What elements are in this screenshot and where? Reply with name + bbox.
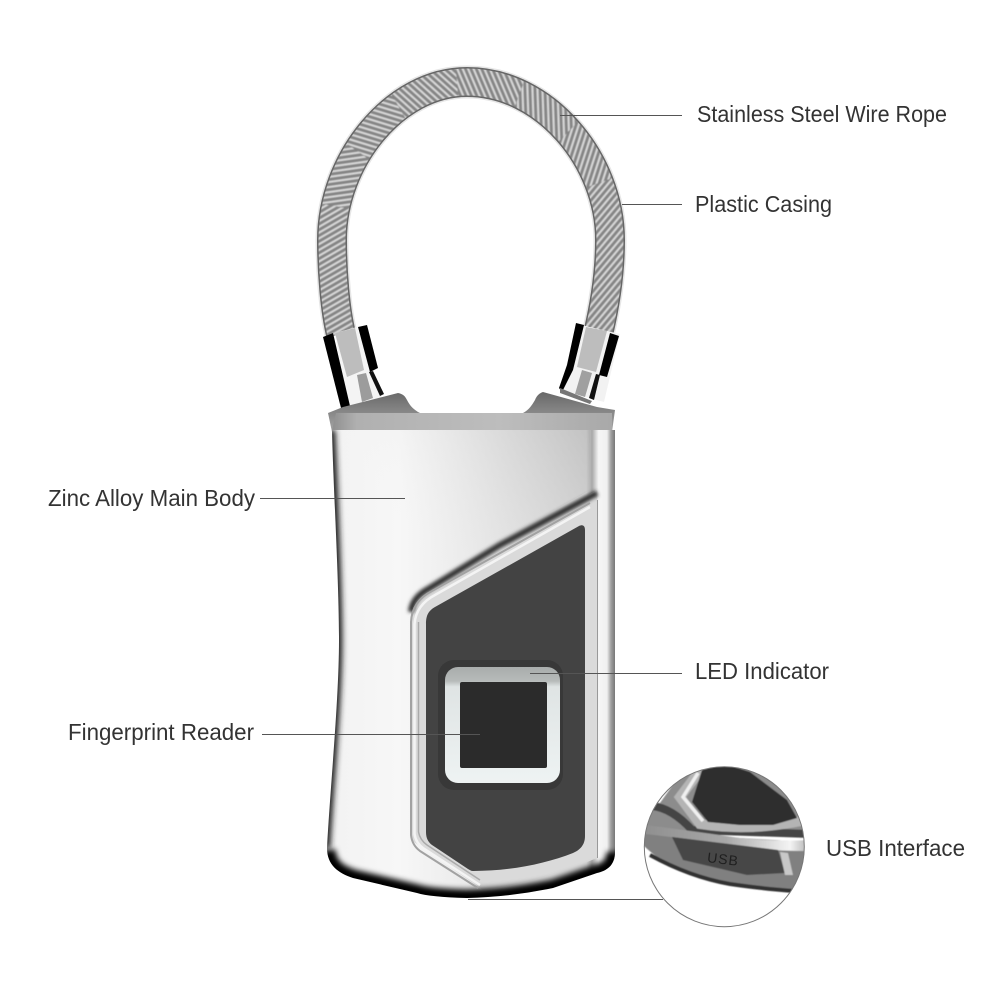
USB detail lens (640, 760, 812, 927)
callout: Zinc Alloy Main Body: Zinc Alloy Main Body (48, 485, 255, 511)
fingerprint reader (438, 660, 563, 790)
callout: USB Interface: USB Interface (826, 835, 965, 861)
callout: Plastic Casing: Plastic Casing (695, 191, 832, 217)
left shackle ferrule (323, 325, 384, 412)
wire rope shackle (316, 66, 626, 336)
bezel lines (411, 503, 590, 888)
callout: Fingerprint Reader: Fingerprint Reader (68, 719, 254, 745)
USB port label: USB (706, 849, 740, 869)
right shackle ferrule (559, 323, 620, 404)
top band (332, 413, 612, 430)
casing shading (326, 430, 615, 898)
main casing (327, 430, 615, 898)
infographic: fingerprint padlock anatomy (48, 66, 964, 928)
neck bosses and ears (328, 392, 615, 432)
dark panel (426, 525, 585, 871)
callout: LED Indicator: LED Indicator (695, 658, 829, 684)
lock body (326, 392, 615, 898)
callout: Stainless Steel Wire Rope: Stainless Steel Wire Rope (697, 101, 947, 127)
